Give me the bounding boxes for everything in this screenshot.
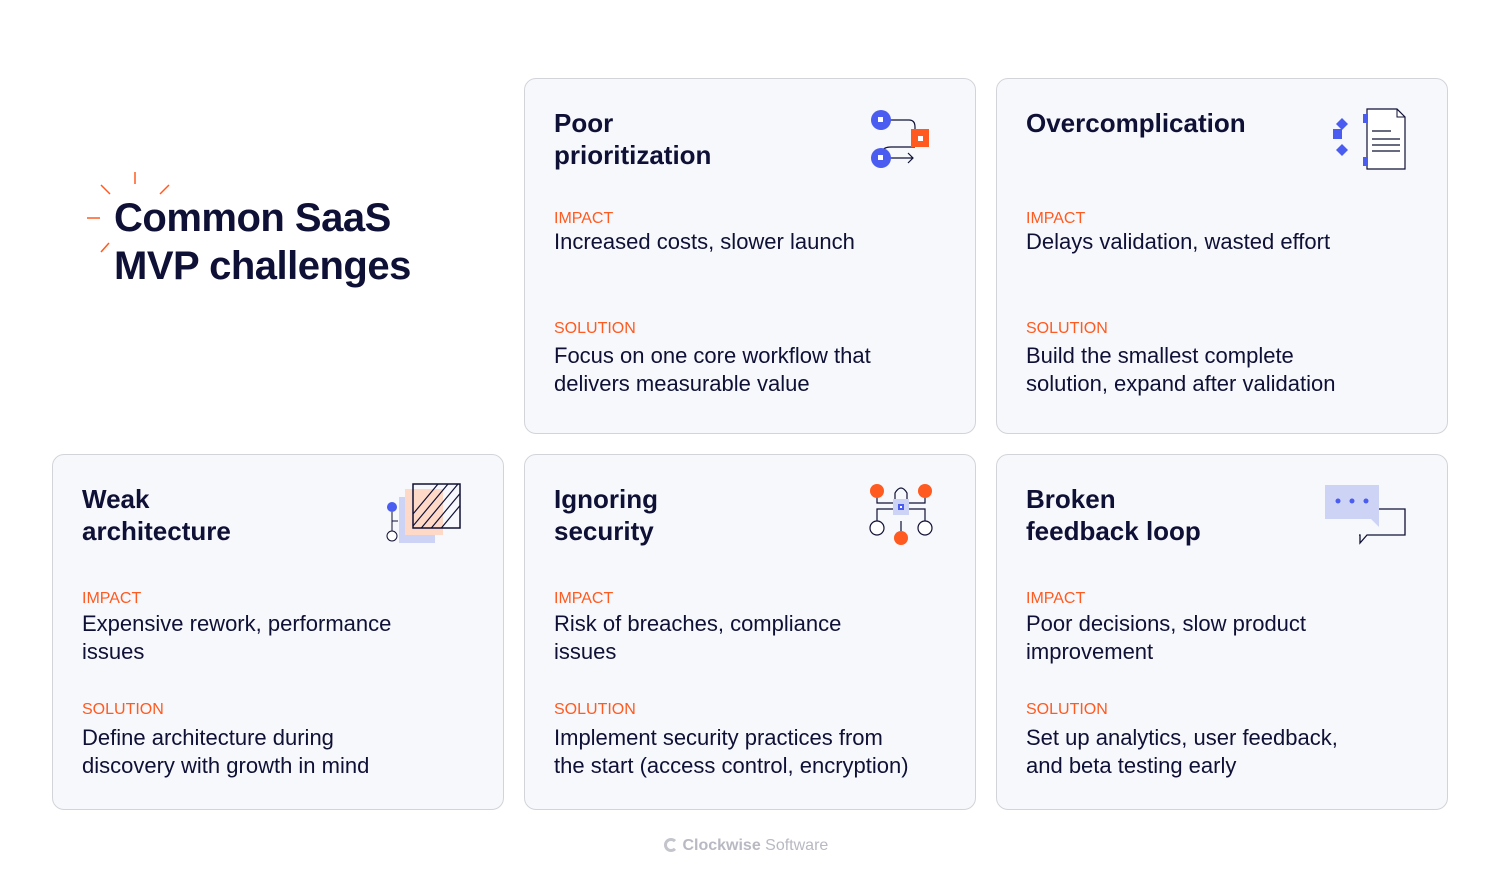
panel: weak architecture: IMPACT	[82, 590, 141, 607]
panel: overcomplication: solution, expand after validation	[1026, 371, 1335, 396]
panel: overcomplication: Overcomplication	[1026, 108, 1246, 138]
panel: weak architecture: architecture	[82, 516, 231, 546]
panel: broken feedback loop: feedback loop	[1026, 516, 1201, 546]
panel: ignoring security: SOLUTION	[554, 701, 636, 718]
panel: broken feedback loop: IMPACT	[1026, 590, 1085, 607]
panel: poor prioritization: prioritization	[554, 140, 711, 170]
panel: broken feedback loop: Broken	[1026, 484, 1116, 514]
panel: ignoring security: the start (access control, encryption)	[554, 753, 909, 778]
panel: ignoring security: IMPACT	[554, 590, 613, 607]
icon: document	[1333, 108, 1406, 170]
panel: poor prioritization: SOLUTION	[554, 320, 636, 337]
panel: ignoring security: Ignoring	[554, 484, 658, 514]
icon: chat bubble	[1325, 485, 1406, 545]
panel: weak architecture	[52, 454, 504, 810]
panel: ignoring security: Implement security practices from	[554, 725, 883, 750]
title: Common SaaS	[114, 196, 391, 240]
panel: weak architecture: SOLUTION	[82, 701, 164, 718]
icon: security network	[869, 484, 933, 545]
panel: ignoring security: security	[554, 516, 654, 546]
panel: broken feedback loop: SOLUTION	[1026, 701, 1108, 718]
panel: broken feedback loop: improvement	[1026, 639, 1153, 664]
panel: weak architecture: Expensive rework, performance	[82, 611, 391, 636]
panel: overcomplication: SOLUTION	[1026, 320, 1108, 337]
panel: poor prioritization: IMPACT	[554, 210, 613, 227]
panel: weak architecture: Weak	[82, 484, 149, 514]
panel: overcomplication: Delays validation, wasted effort	[1026, 229, 1330, 254]
icon: sparkle	[87, 172, 170, 252]
title	[87, 172, 411, 288]
panel: poor prioritization: Increased costs, slower launch	[554, 229, 855, 254]
logo: Clockwise Software: Clockwise Software	[682, 837, 828, 854]
panel: broken feedback loop: Set up analytics, user feedback,	[1026, 725, 1338, 750]
icon: workflow	[871, 110, 929, 168]
panel: ignoring security	[524, 454, 976, 810]
panel: broken feedback loop	[996, 454, 1448, 810]
panel: overcomplication	[996, 78, 1448, 434]
panel: weak architecture: issues	[82, 639, 144, 664]
panel: weak architecture: Define architecture during	[82, 725, 334, 750]
panel: poor prioritization: Poor	[554, 108, 613, 138]
icon: architecture	[386, 483, 461, 543]
panel: broken feedback loop: and beta testing early	[1026, 753, 1236, 778]
panel: poor prioritization	[524, 78, 976, 434]
panel: ignoring security: Risk of breaches, compliance	[554, 611, 841, 636]
panel: ignoring security: issues	[554, 639, 616, 664]
panel: poor prioritization: delivers measurable value	[554, 371, 810, 396]
panel: overcomplication: Build the smallest complete	[1026, 343, 1294, 368]
panel: overcomplication: IMPACT	[1026, 210, 1085, 227]
panel: weak architecture: discovery with growth in mind	[82, 753, 369, 778]
panel: poor prioritization: Focus on one core workflow that	[554, 343, 871, 368]
panel: broken feedback loop: Poor decisions, slow product	[1026, 611, 1306, 636]
title: MVP challenges	[114, 244, 411, 288]
